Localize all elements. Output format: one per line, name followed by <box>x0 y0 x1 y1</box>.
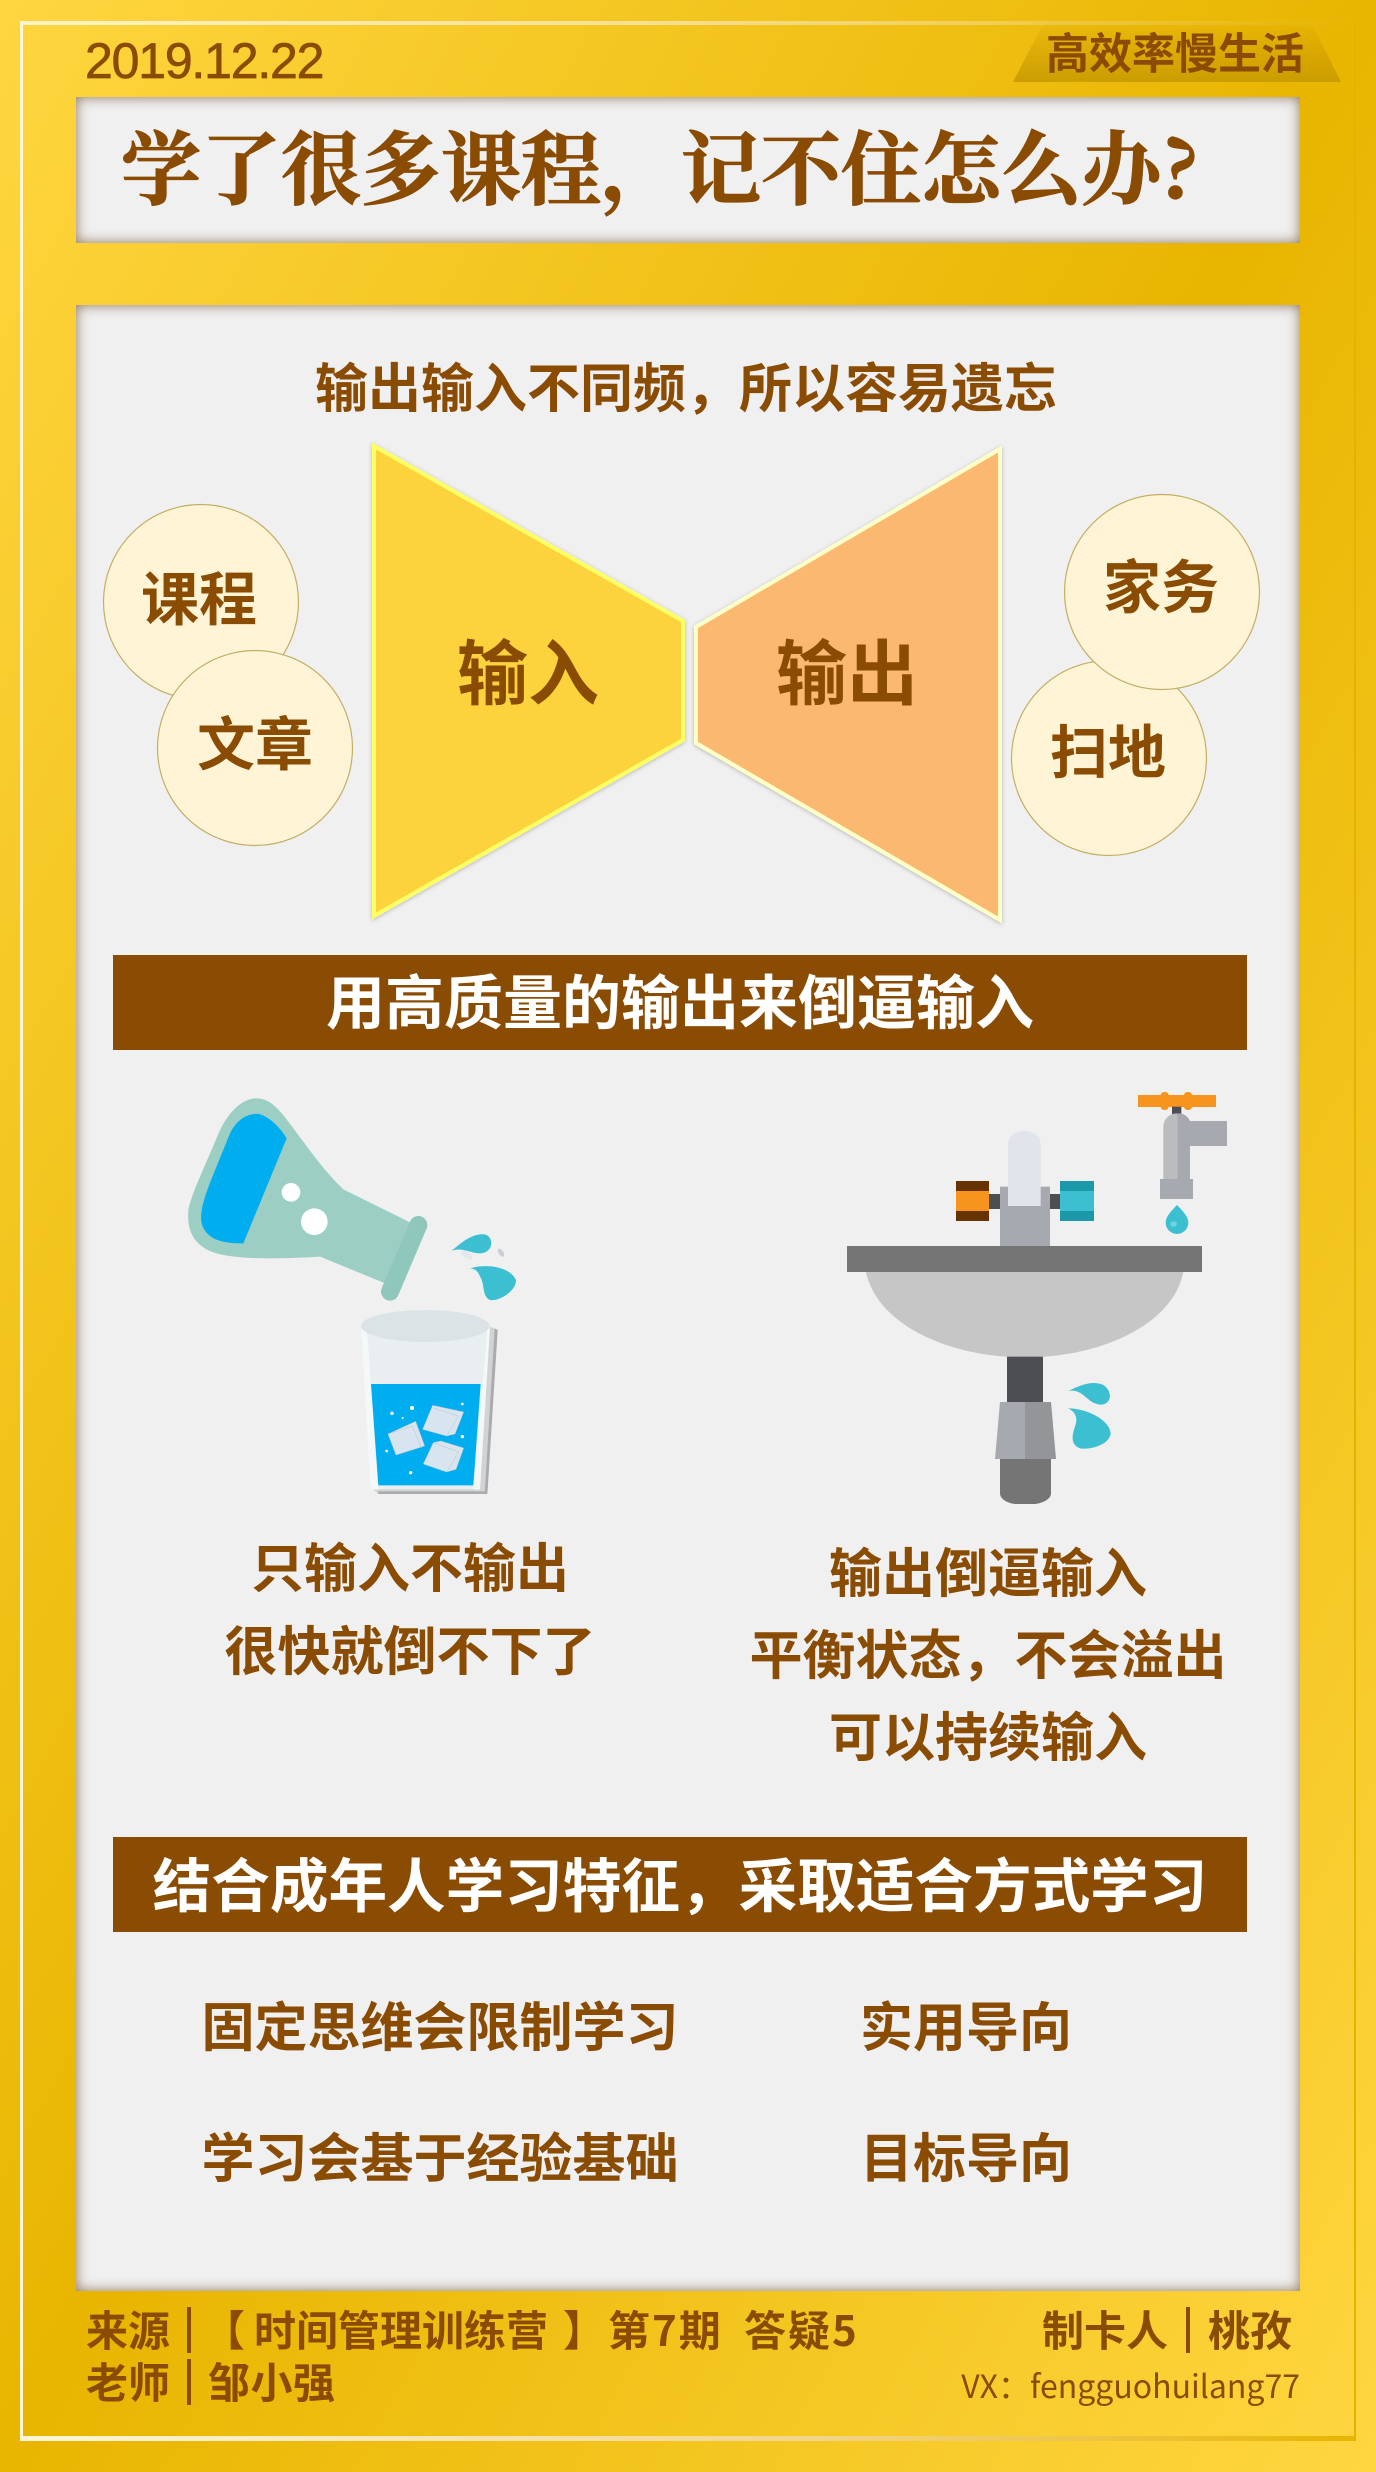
band heading 1 <box>113 955 1247 1050</box>
footer: source: 第7期 <box>608 2298 723 2359</box>
band heading 2 text: 结合成年人学习特征，采取适合方式学习 <box>153 1855 1207 1920</box>
faucet base <box>1000 1187 1050 1247</box>
glass water <box>371 1384 481 1485</box>
air dots <box>385 1403 464 1474</box>
caption: right: 输出倒逼输入 <box>829 1545 1147 1604</box>
caption: right <box>750 1545 1226 1768</box>
faucet spout <box>1008 1131 1041 1206</box>
ice cube 3 <box>423 1441 464 1472</box>
splash drops <box>452 1234 516 1300</box>
footer: author <box>1042 2298 1292 2359</box>
circle: 扫地 <box>1012 660 1206 856</box>
circle: 课程 <box>104 504 298 700</box>
tap handle <box>1138 1092 1216 1110</box>
label: 扫地: 扫地 <box>1050 721 1166 786</box>
footer: source: 答疑5 <box>744 2298 859 2359</box>
date: 2019.12.22 <box>85 33 323 89</box>
diagram: input output funnels <box>102 442 1260 925</box>
funnel: output <box>696 449 1000 920</box>
footer: contact: VX：fengguohuilang77 <box>961 2362 1300 2408</box>
bubbles <box>282 1183 328 1235</box>
footer: source: 来源 <box>86 2298 170 2359</box>
footer: author: 制卡人 <box>1042 2298 1168 2359</box>
band heading 2 <box>113 1837 1247 1932</box>
footer: source: 】 <box>563 2298 605 2359</box>
label: 家务: 家务 <box>1103 556 1219 621</box>
title: 学了很多课程，记不住怎么办? <box>121 106 1199 221</box>
bottle body <box>188 1098 413 1287</box>
footer: teacher: 老师 <box>86 2350 170 2411</box>
counter <box>847 1246 1202 1272</box>
caption: left: 只输入不输出 <box>251 1540 569 1599</box>
tap stem <box>1172 1107 1181 1115</box>
list item: 固定思维会限制学习: 固定思维会限制学习 <box>202 1999 678 2058</box>
label: 输出: 输出 <box>776 636 918 715</box>
footer: source: 时间管理训练营 <box>254 2298 548 2359</box>
splash drops <box>1068 1383 1111 1449</box>
funnel: input <box>374 446 683 916</box>
label: 课程: 课程 <box>141 568 257 633</box>
list item: 实用导向: 实用导向 <box>860 1999 1072 2058</box>
glass shadow <box>373 1327 498 1494</box>
footer: teacher: 邹小强 <box>208 2350 336 2411</box>
caption: right: 可以持续输入 <box>829 1709 1147 1768</box>
small droplets <box>459 1248 506 1261</box>
icon: sink with tap <box>847 1092 1227 1504</box>
tap drop <box>1166 1205 1188 1234</box>
glass highlight <box>361 1327 378 1489</box>
caption: left <box>224 1540 596 1682</box>
hot valve <box>956 1181 989 1221</box>
bottle water <box>201 1114 287 1243</box>
glass body <box>361 1327 490 1489</box>
footer: author: 桃孜 <box>1208 2298 1292 2359</box>
caption: right: 平衡状态，不会溢出 <box>750 1627 1226 1686</box>
label: 文章: 文章 <box>197 713 313 778</box>
subtitle: 输出输入不同频，所以容易遗忘 <box>315 360 1057 419</box>
title panel <box>76 97 1300 243</box>
glass rim <box>361 1310 490 1342</box>
list item: 学习会基于经验基础: 学习会基于经验基础 <box>202 2130 678 2189</box>
ice cube 1 <box>388 1421 425 1455</box>
cold valve <box>1060 1181 1094 1221</box>
ice cube 2 <box>423 1405 464 1436</box>
footer: source <box>86 2298 859 2359</box>
caption: left: 很快就倒不下了 <box>224 1623 596 1682</box>
faucet connectors <box>989 1194 1060 1209</box>
list item: 目标导向: 目标导向 <box>860 2130 1072 2189</box>
band heading 1 text: 用高质量的输出来倒逼输入 <box>326 971 1034 1037</box>
brand label: 高效率慢生活 <box>1046 31 1304 79</box>
circle: 家务 <box>1064 494 1260 690</box>
circle: 文章 <box>158 650 352 846</box>
drain pipe <box>1007 1357 1043 1403</box>
main panel <box>76 305 1300 2291</box>
drain trap <box>1000 1459 1051 1504</box>
icon: bottle pouring into glass <box>188 1098 516 1494</box>
tap body <box>1160 1113 1227 1199</box>
footer: teacher <box>86 2350 336 2411</box>
basin <box>866 1272 1183 1357</box>
footer: source: 【 <box>203 2298 245 2359</box>
header ribbon <box>1013 35 1341 82</box>
bottle lip <box>390 1225 418 1292</box>
label: 输入: 输入 <box>457 636 599 715</box>
drain cone <box>995 1402 1056 1459</box>
